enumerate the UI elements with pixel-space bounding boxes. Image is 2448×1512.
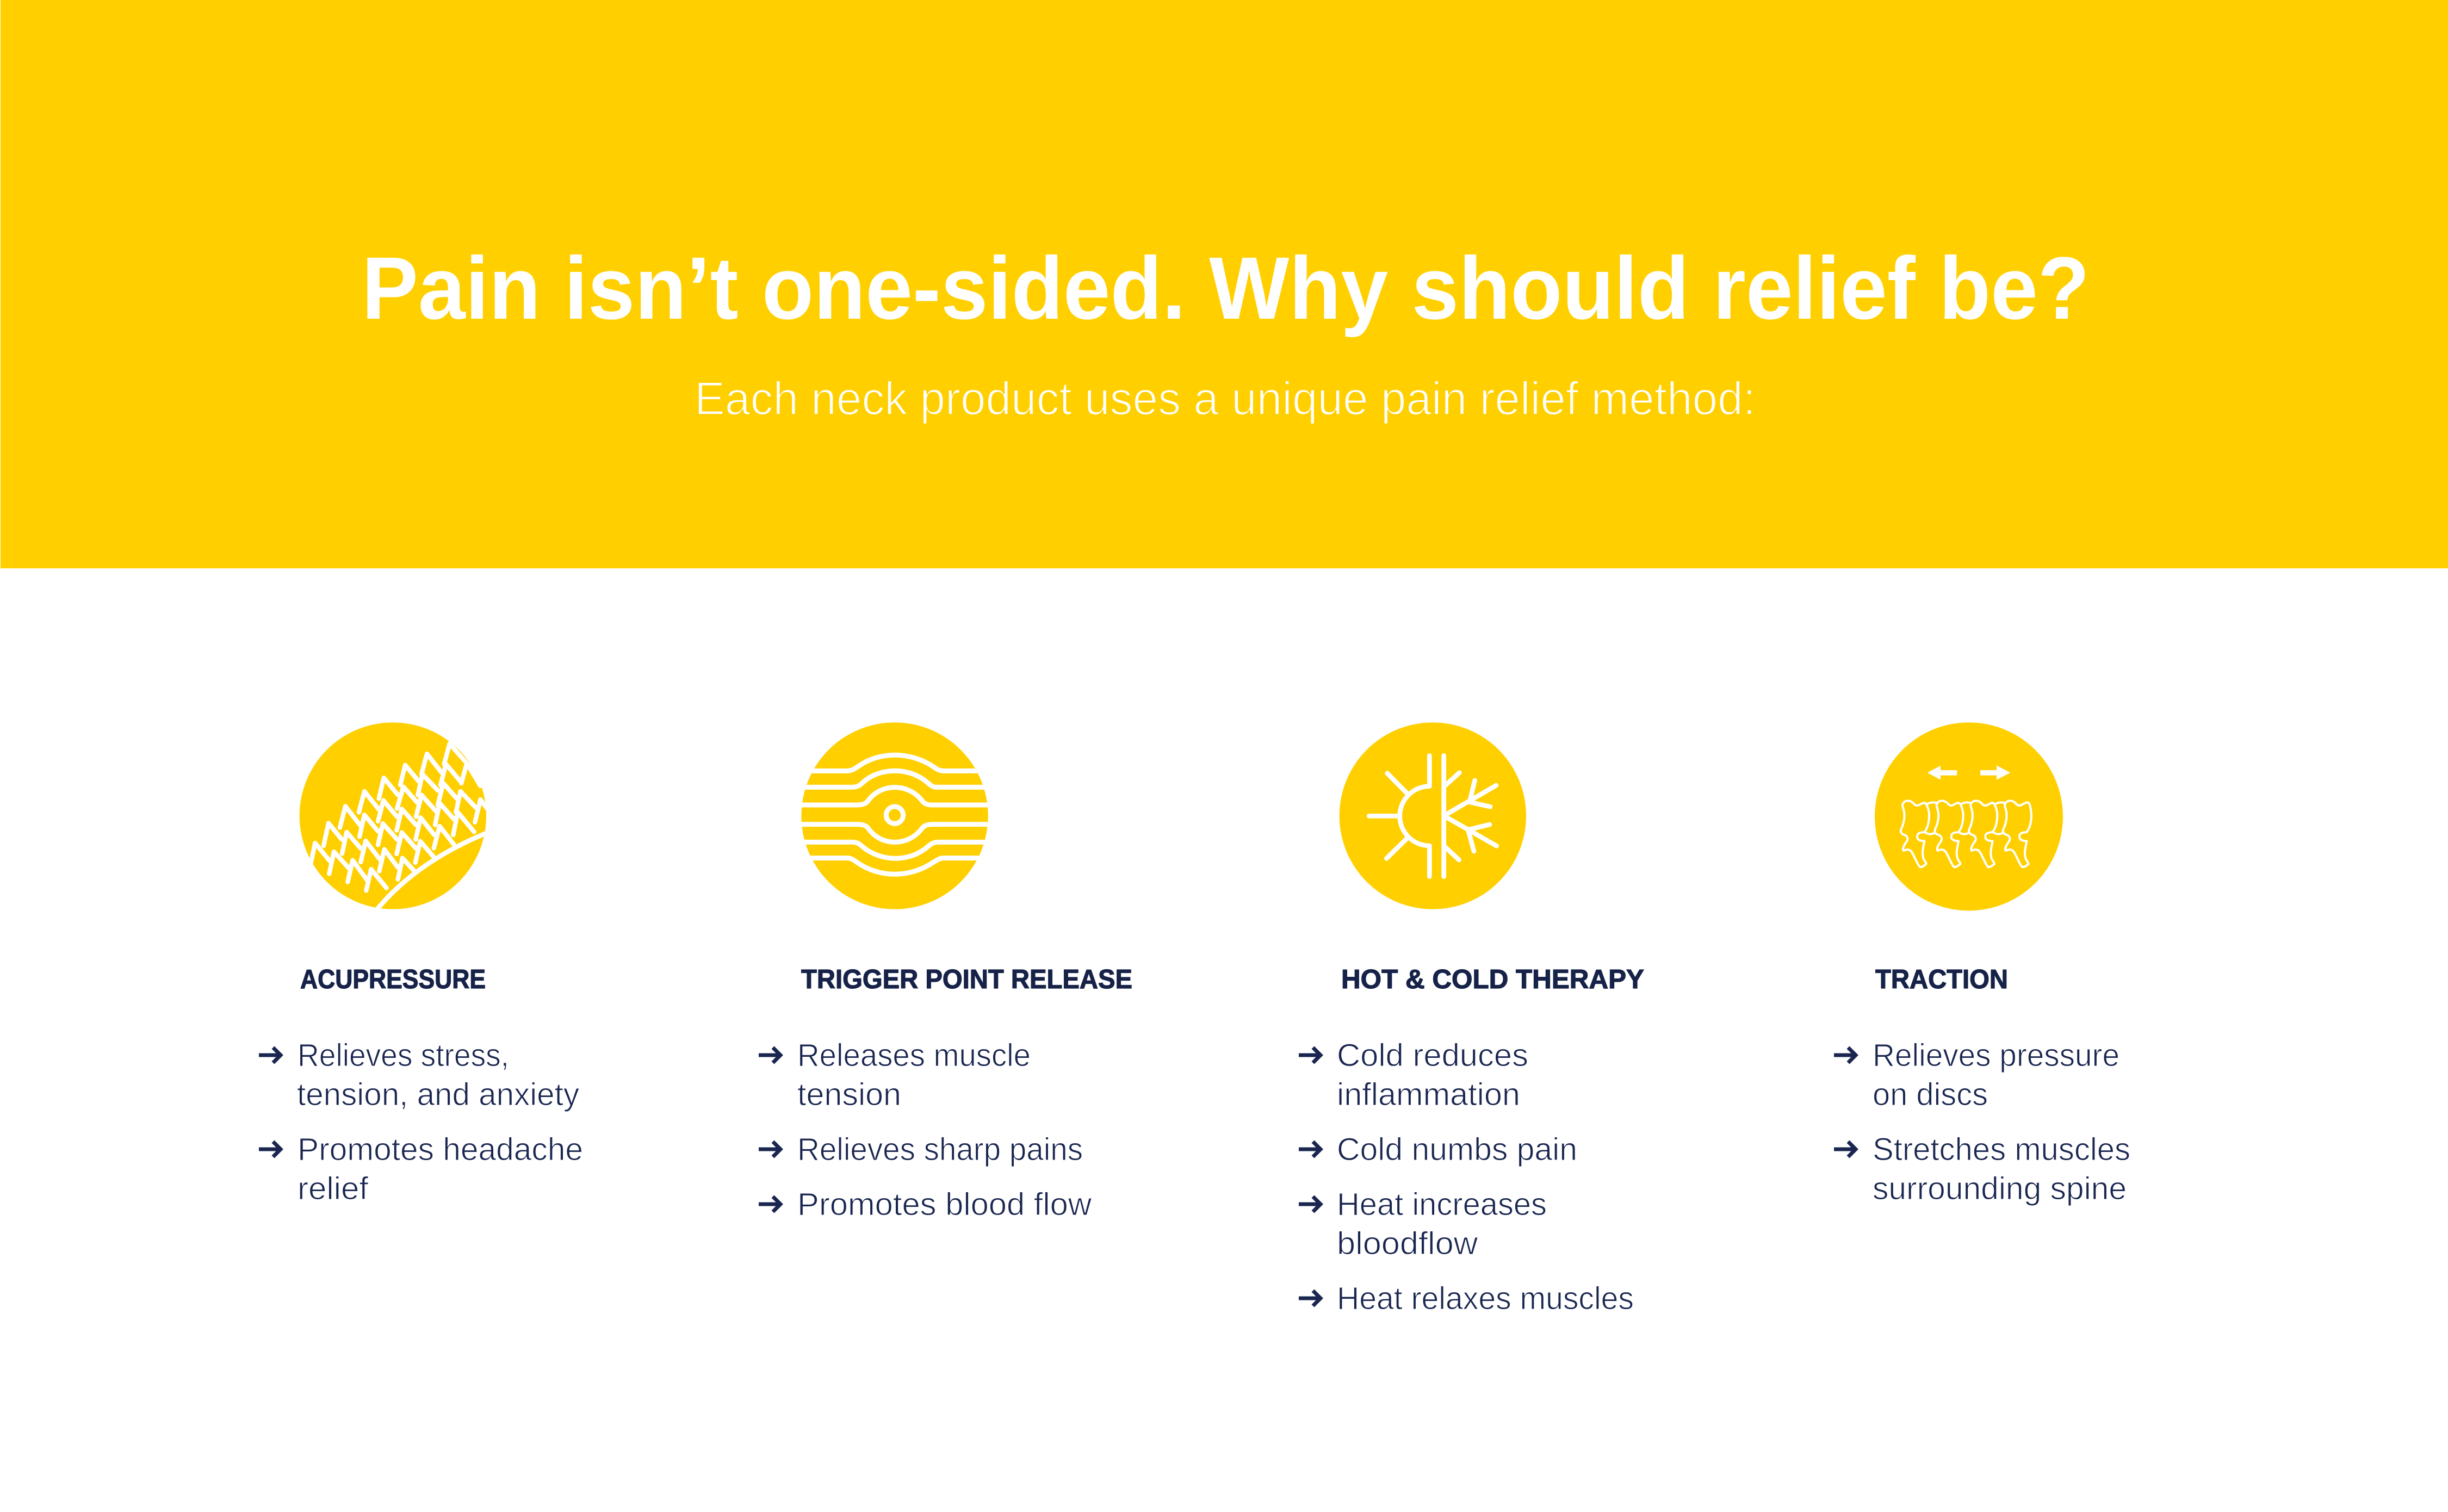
bullet list: Cold reduces	[1337, 1038, 1528, 1073]
heading: TRIGGER POINT RELEASE	[801, 965, 1132, 994]
bullet list: on discs	[1873, 1077, 1988, 1112]
bullet list	[259, 1038, 583, 1206]
title: Pain isn’t one-sided. Why should relief be?	[362, 238, 2090, 338]
bullet list: Relieves pressure	[1873, 1038, 2119, 1073]
bullet list: inflammation	[1337, 1077, 1520, 1112]
bullet list	[1299, 1038, 1634, 1316]
bullet list: Stretches muscles	[1873, 1132, 2130, 1167]
bullet list: relief	[298, 1171, 369, 1206]
icon: trigger point	[794, 722, 995, 909]
header banner	[1, 0, 2448, 568]
icon: spine traction	[1875, 722, 2063, 910]
heading: HOT & COLD THERAPY	[1341, 965, 1644, 994]
column: hot and cold therapy	[1299, 722, 1644, 1316]
bullet list: surrounding spine	[1873, 1171, 2127, 1206]
icon: acupressure mat	[300, 722, 488, 910]
heading: TRACTION	[1875, 965, 2008, 994]
bullet list: Relieves stress,	[298, 1038, 509, 1073]
bullet list: Relieves sharp pains	[797, 1132, 1083, 1167]
bullet list: Releases muscle	[797, 1038, 1031, 1073]
bullet list: Heat increases	[1337, 1187, 1547, 1222]
bullet list	[759, 1038, 1092, 1222]
column: acupressure	[259, 722, 583, 1206]
bullet list: tension, and anxiety	[297, 1077, 579, 1112]
column: traction	[1834, 722, 2130, 1206]
bullet list: Heat relaxes muscles	[1337, 1281, 1634, 1316]
bullet list: Promotes headache	[298, 1132, 583, 1167]
bullet list	[1834, 1038, 2130, 1206]
column: trigger point release	[759, 722, 1132, 1222]
bullet list: Promotes blood flow	[797, 1187, 1092, 1222]
heading: ACUPRESSURE	[300, 965, 486, 994]
icon: sun and snowflake	[1340, 722, 1526, 909]
bullet list: bloodflow	[1337, 1226, 1478, 1261]
bullet list: Cold numbs pain	[1337, 1132, 1577, 1167]
subtitle: Each neck product uses a unique pain relief method:	[695, 373, 1756, 425]
bullet list: tension	[797, 1077, 901, 1112]
